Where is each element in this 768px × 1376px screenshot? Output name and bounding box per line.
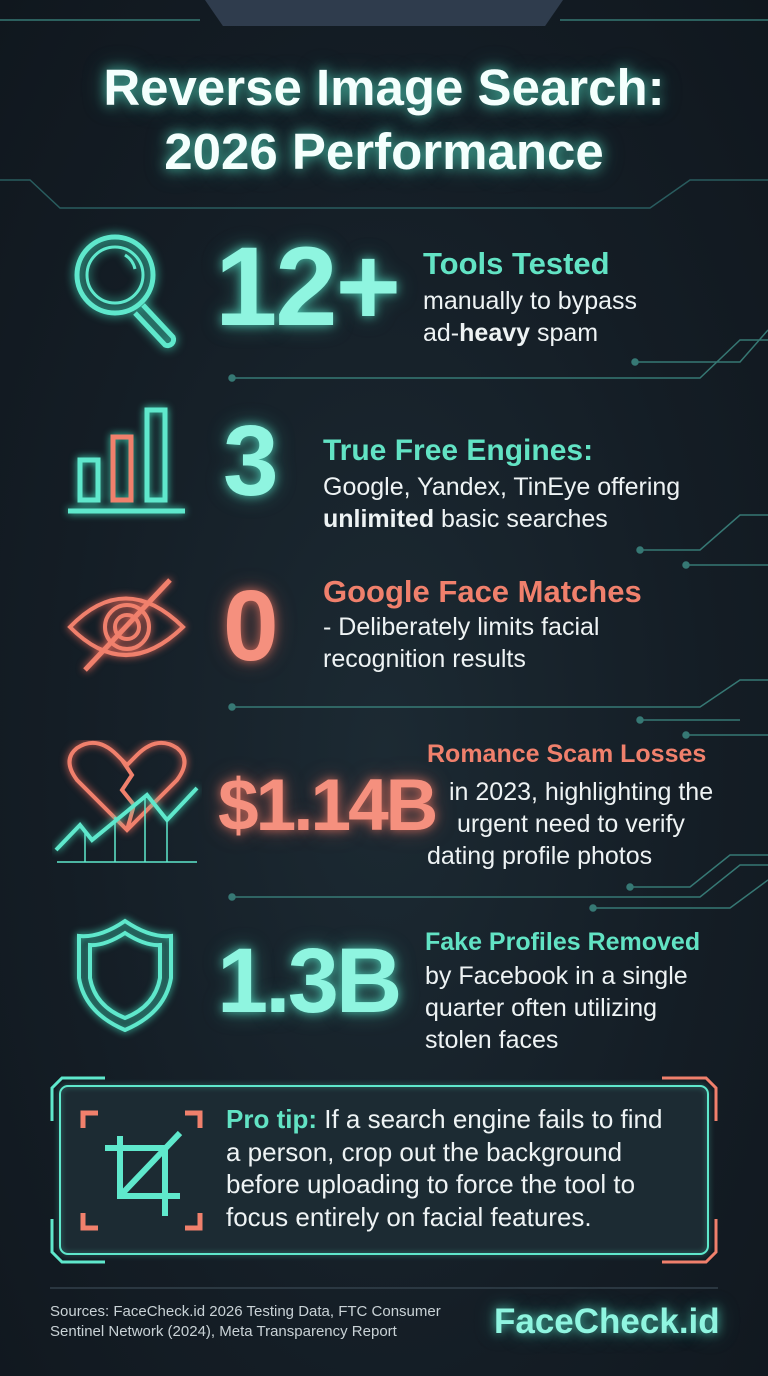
callout: pro tip (50, 1076, 718, 1264)
text: quarter often utilizing (425, 994, 657, 1022)
sources: Sentinel Network (2024), Meta Transparency Report (50, 1323, 397, 1340)
text: recognition results (323, 645, 526, 673)
stat number: 12+ (215, 224, 399, 349)
text: Tools Tested (423, 246, 610, 281)
row: romance scam: Romance Scam Losses (427, 740, 706, 768)
text: True Free Engines: (323, 434, 593, 467)
title: 2026 Performance (164, 123, 604, 180)
icon: shield (71, 914, 179, 1037)
text (427, 740, 713, 870)
top tab (205, 0, 563, 26)
text: Google, Yandex, TinEye offering (323, 473, 680, 501)
row: google face matches (63, 570, 642, 682)
row: romance scam (52, 740, 713, 870)
stat number: $1.14B (218, 765, 435, 846)
text: by Facebook in a single (425, 962, 688, 990)
title: Reverse Image Search: (103, 59, 665, 116)
stat number: 0 (223, 570, 277, 682)
text (425, 928, 700, 1054)
icon: magnifier (67, 227, 183, 355)
text: stolen faces (425, 1026, 558, 1054)
text: unlimited basic searches (323, 505, 608, 533)
row: romance scam: urgent need to verify (457, 810, 685, 838)
row: romance scam: in 2023, highlighting the (449, 778, 713, 806)
tip text: before uploading to force the tool to (226, 1169, 635, 1199)
text (323, 574, 642, 673)
tip text: focus entirely on facial features. (226, 1202, 592, 1232)
sources: Sources: FaceCheck.id 2026 Testing Data, FTC Consumer (50, 1303, 441, 1320)
icon: eye crossed (63, 574, 190, 676)
sources (50, 1303, 441, 1340)
icon: broken heart with chart (52, 740, 202, 863)
text (423, 246, 637, 347)
row: tools tested (67, 224, 637, 355)
stat number: 3 (223, 405, 277, 517)
row: romance scam: dating profile photos (427, 842, 652, 870)
tip text: Pro tip: If a search engine fails to find (226, 1104, 662, 1134)
tip text (226, 1104, 662, 1232)
text: - Deliberately limits facial (323, 613, 599, 641)
text: ad-heavy spam (423, 319, 598, 347)
text (323, 434, 680, 533)
row: free engines (63, 402, 680, 533)
tip text: a person, crop out the background (226, 1136, 622, 1166)
icon: crop (80, 1110, 202, 1230)
text: Google Face Matches (323, 574, 642, 609)
text: manually to bypass (423, 287, 637, 315)
brand logo: FaceCheck.id (494, 1302, 720, 1341)
title (94, 58, 668, 180)
icon: bar chart (63, 402, 190, 520)
row: fake profiles (71, 914, 700, 1054)
text: Fake Profiles Removed (425, 928, 700, 956)
stat number: 1.3B (217, 930, 399, 1032)
